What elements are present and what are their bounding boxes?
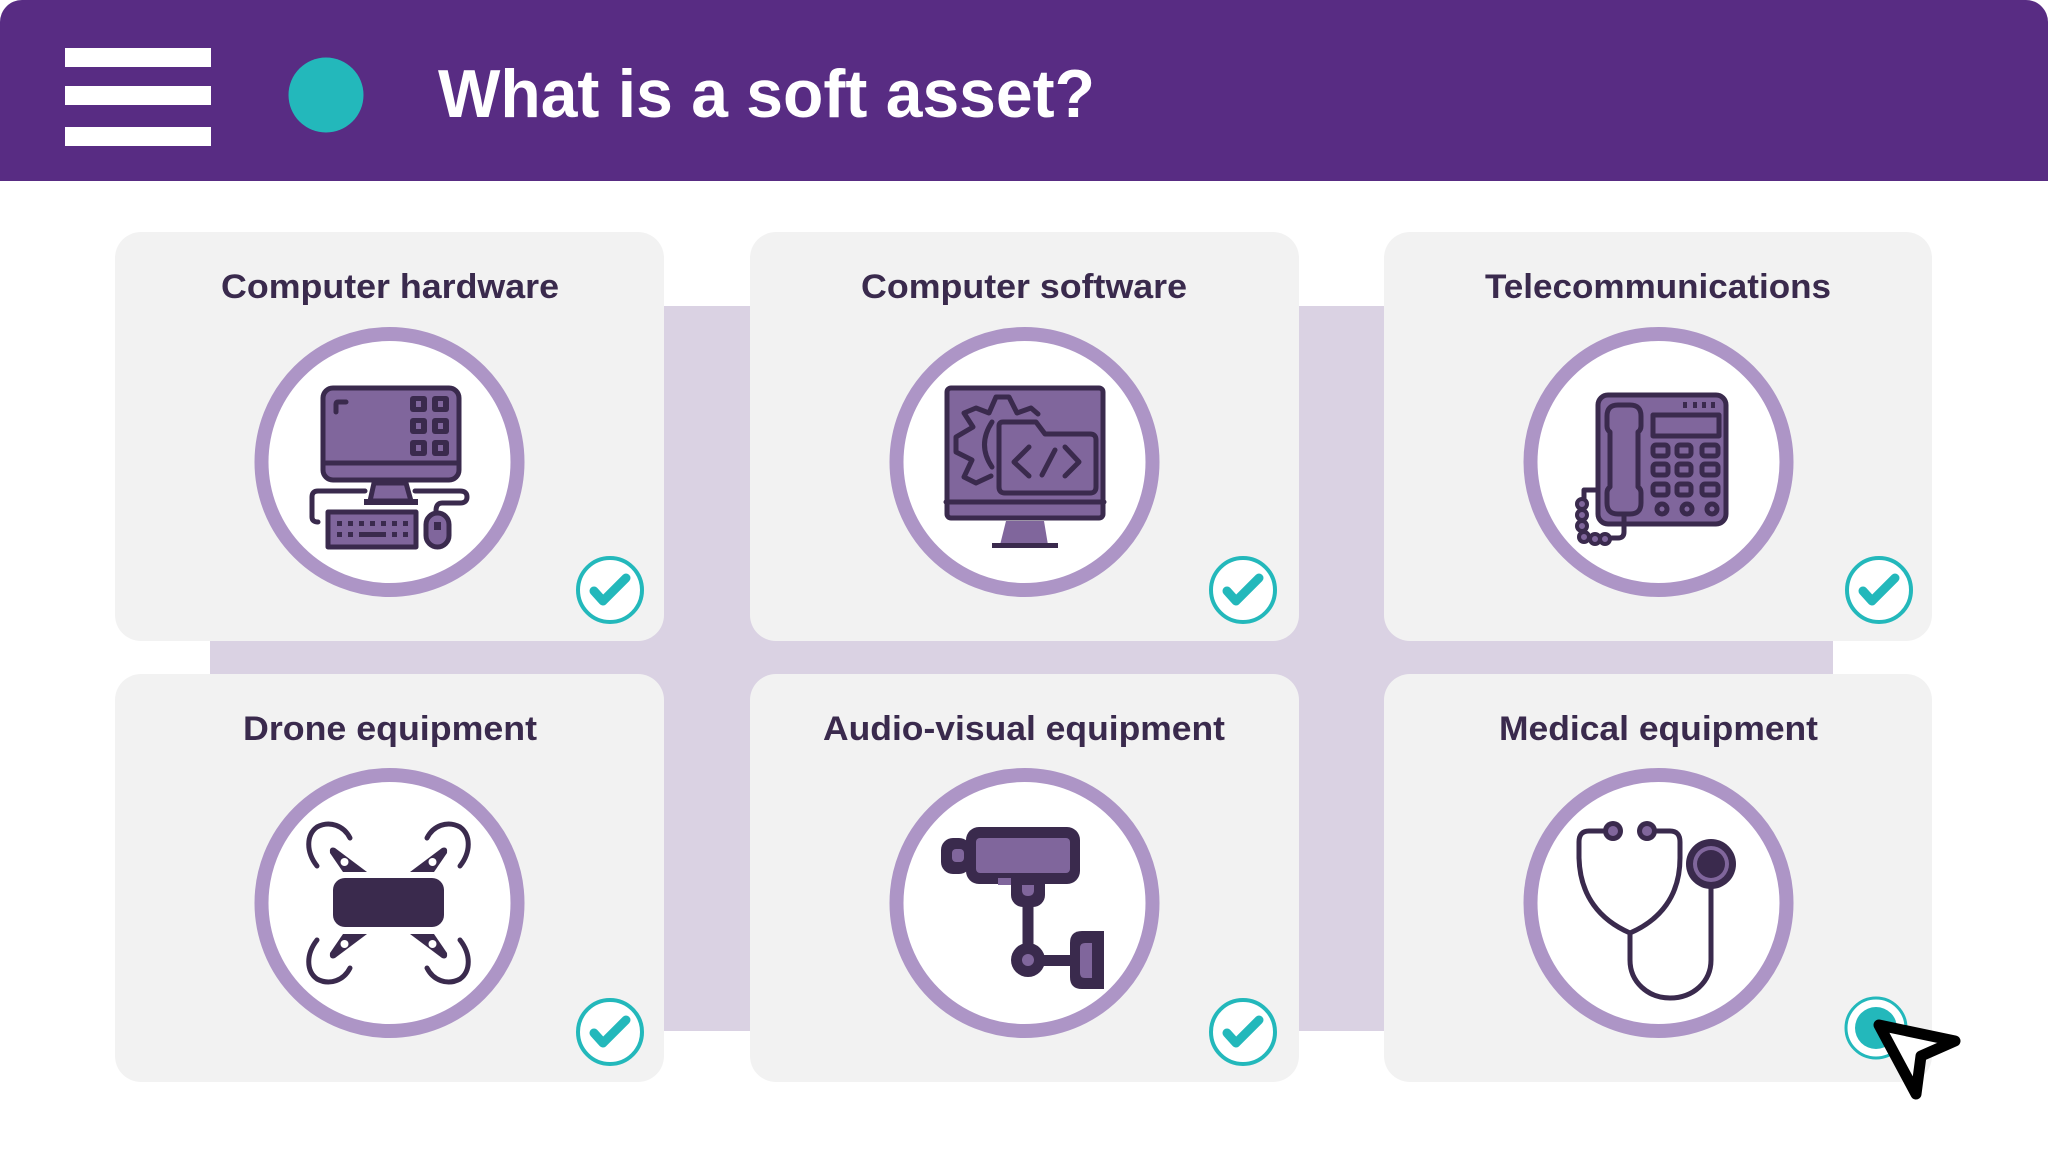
check badge xyxy=(1211,558,1275,622)
panel: medical equipment xyxy=(1384,674,1955,1094)
panel: drone equipment xyxy=(115,674,664,1082)
heading: telecommunications: Telecommunications xyxy=(1485,268,1831,306)
heading: medical equipment: Medical equipment xyxy=(1499,710,1818,748)
heading: drone equipment: Drone equipment xyxy=(243,710,537,748)
heading: computer hardware: Computer hardware xyxy=(221,268,559,306)
panel: computer software xyxy=(750,232,1299,641)
heading: computer software: Computer software xyxy=(861,268,1187,306)
icon: desktop computer xyxy=(312,388,467,547)
panel: telecommunications xyxy=(1384,232,1932,641)
check badge xyxy=(1847,558,1911,622)
title: What is a soft asset? xyxy=(438,56,1095,132)
header bar xyxy=(0,0,2048,181)
background lavender panel xyxy=(210,306,1833,1031)
panel: audio-visual equipment xyxy=(750,674,1299,1082)
check badge xyxy=(1211,1000,1275,1064)
icon: stethoscope xyxy=(1579,821,1736,998)
icon ring: computer software xyxy=(896,334,1152,590)
icon: desk telephone xyxy=(1577,395,1726,544)
selection badge xyxy=(1846,998,1906,1058)
teal status dot xyxy=(288,58,364,132)
icon ring: telecommunications xyxy=(1530,334,1786,590)
menu icon xyxy=(65,48,211,146)
icon ring: drone equipment xyxy=(262,775,518,1031)
icon ring: audio-visual equipment xyxy=(896,775,1152,1031)
heading: audio-visual equipment: Audio-visual equipment xyxy=(823,710,1225,748)
panel: computer hardware xyxy=(115,232,664,641)
icon ring: computer hardware xyxy=(262,334,518,590)
icon: security camera xyxy=(941,827,1104,989)
check badge xyxy=(578,558,642,622)
icon: software monitor xyxy=(946,388,1104,548)
check badge xyxy=(578,1000,642,1064)
icon ring: medical equipment xyxy=(1530,775,1786,1031)
icon: mouse cursor arrow xyxy=(1879,1025,1955,1094)
icon: drone xyxy=(309,824,468,982)
